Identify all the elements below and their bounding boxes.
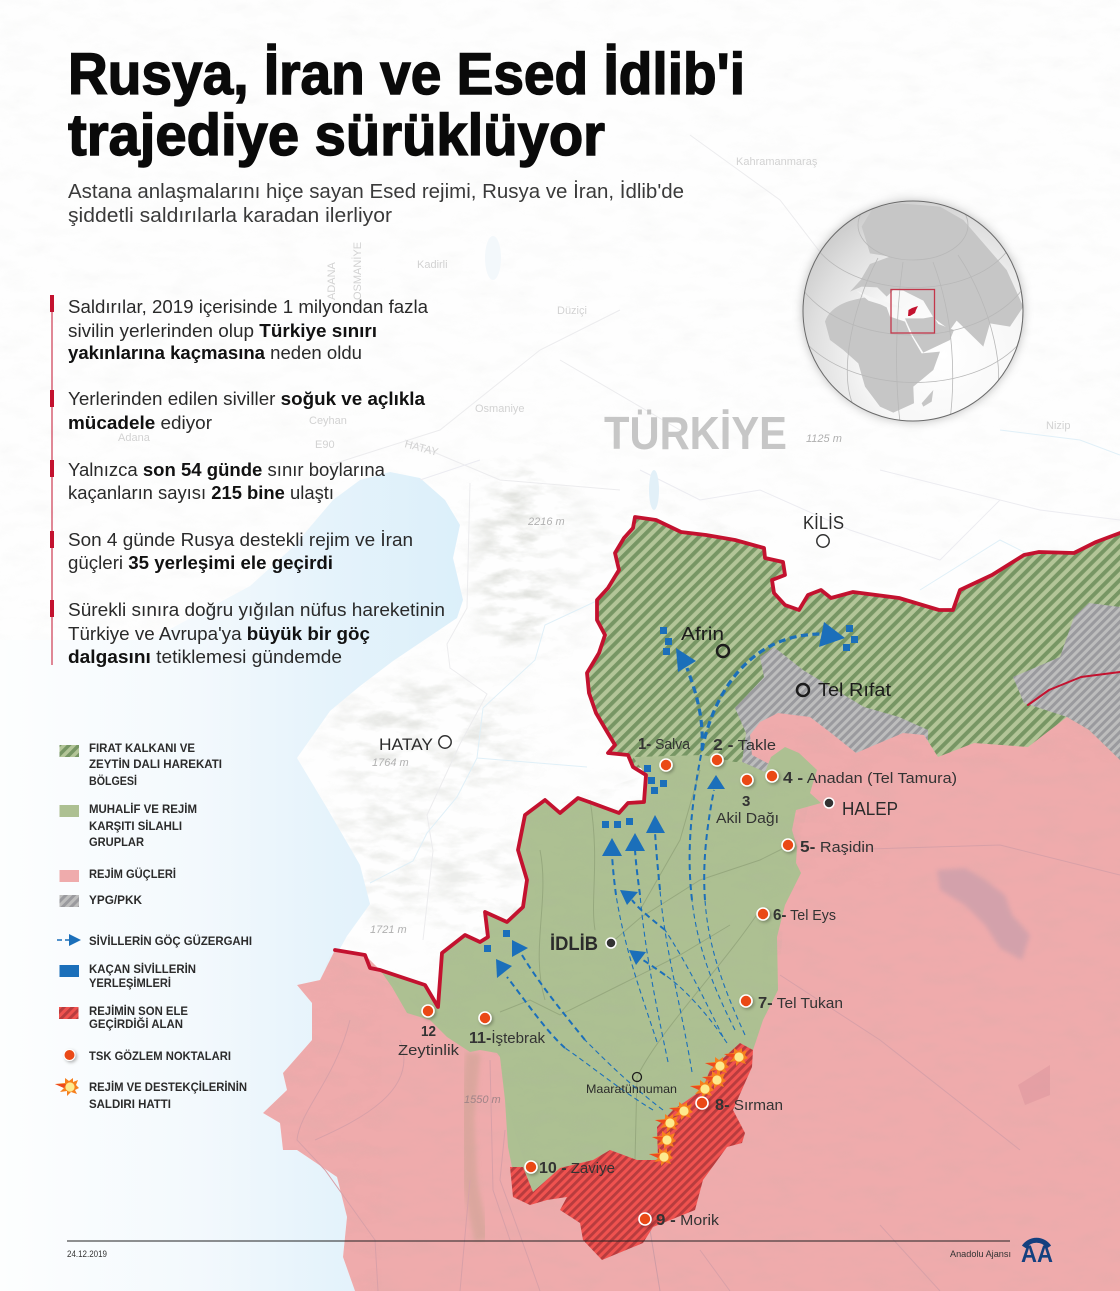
heading country name: Türkiye: TÜRKİYE: [604, 407, 787, 459]
faint base map place names: Kadirli: [417, 259, 448, 271]
text block: key facts: yakınlarına kaçmasına neden oldu: [68, 342, 362, 363]
faint base map place names: Nizip: [1046, 420, 1070, 432]
map labels: 8- Sırman: [715, 1097, 783, 1114]
legend: REJİM GÜÇLERİ: [89, 866, 176, 881]
map labels: KİLİS: [803, 513, 844, 533]
faint base map place names: Osmaniye: [475, 403, 525, 415]
map labels: HALEP: [842, 799, 898, 819]
legend: YERLEŞİMLERİ: [89, 975, 171, 990]
locator globe: [803, 190, 1023, 422]
map labels: 5- Raşidin: [800, 839, 874, 856]
footer rule: [67, 1240, 1010, 1242]
region: YPG/PKK east: [1013, 603, 1120, 760]
subtitle: şiddetli saldırılarla karadan ilerliyor: [68, 205, 392, 227]
text block: key facts: sivilin yerlerinden olup Türkiye sınırı: [68, 320, 377, 341]
text block: key facts: Yalnızca son 54 günde sınır boylarına: [68, 459, 386, 480]
map labels: 11-İştebrak: [469, 1029, 546, 1047]
map labels: Maaratünnuman: [586, 1082, 677, 1096]
text block: key facts: dalgasını tetiklemesi gündemde: [68, 646, 342, 667]
faint base map place names: 1764 m: [372, 757, 409, 769]
attack line flames: [649, 1048, 748, 1166]
faint base map place names: 1125 m: [806, 433, 842, 445]
text block: key facts: Son 4 günde Rusya destekli rejim ve İran: [68, 529, 413, 550]
legend: GRUPLAR: [89, 835, 144, 849]
Turkish border line: [335, 517, 1120, 1007]
region: armed opposition groups: [380, 747, 821, 1192]
map labels: 2 - Takle: [713, 737, 776, 754]
legend: YPG/PKK: [89, 893, 142, 907]
map labels: Zeytinlik: [398, 1042, 460, 1059]
region: Fırat Kalkanı and Zeytin Dalı hatched zone: [587, 517, 1120, 780]
legend: MUHALİF VE REJİM: [89, 801, 197, 816]
city markers: [439, 535, 834, 1082]
legend: REJİMİN SON ELE: [89, 1003, 188, 1018]
map labels: 7- Tel Tukan: [758, 995, 843, 1012]
text block: key facts: kaçanların sayısı 215 bine ulaştı: [68, 482, 334, 503]
map background: land, relief and sea: [120, 134, 1120, 1291]
map labels: 4 - Anadan (Tel Tamura): [783, 770, 957, 787]
map labels: Afrin: [681, 624, 724, 644]
legend: KAÇAN SİVİLLERİN: [89, 961, 196, 976]
faint base map place names: Kahramanmaraş: [736, 156, 818, 168]
arrowheads: [496, 622, 845, 978]
migration routes: dashed arrows: [507, 634, 820, 1110]
title: Rusya, İran ve Esed İdlib'i: [68, 42, 745, 107]
faint base map place names: 1721 m: [370, 924, 407, 936]
faint base map place names: Düziçi: [557, 305, 587, 317]
legend: SALDIRI HATTI: [89, 1097, 171, 1111]
terrain and lakes on regime area: [296, 844, 1120, 1291]
icon: agency logo: AA: [1021, 1241, 1053, 1268]
title: trajediye sürüklüyor: [68, 103, 605, 168]
map labels: [379, 513, 957, 1229]
subtitle: Astana anlaşmalarını hiçe sayan Esed rejimi, Rusya ve İran, İdlib'de: [68, 180, 684, 203]
faint base map place names: ADANA: [326, 261, 338, 300]
roads and relief on opposition area: [500, 770, 782, 1291]
legend: FIRAT KALKANI VE: [89, 741, 195, 755]
map labels: HATAY: [379, 735, 433, 754]
map labels: Akil Dağı: [716, 810, 779, 827]
text block: key facts: Yerlerinden edilen siviller soğuk ve açlıkla: [68, 388, 426, 409]
faint base map place names: [118, 156, 1070, 936]
map labels: 1550 m: [464, 1094, 501, 1106]
map labels: 3: [742, 793, 750, 810]
map labels: 12: [421, 1023, 436, 1040]
legend: REJİM VE DESTEKÇİLERİNİN: [89, 1079, 247, 1094]
map labels: İDLİB: [550, 934, 598, 955]
map labels: Tel Rıfat: [818, 680, 891, 700]
footer source: Anadolu Ajansı: [950, 1249, 1011, 1260]
legend: GEÇİRDİĞİ ALAN: [89, 1016, 183, 1031]
legend: KARŞITI SİLAHLI: [89, 818, 182, 833]
bullet side rule: [50, 295, 54, 665]
text block: key facts: güçleri 35 yerleşimi ele geçirdi: [68, 552, 333, 573]
legend: ZEYTİN DALI HAREKATI: [89, 756, 222, 771]
map labels: 9 - Morik: [656, 1212, 720, 1229]
region: area last captured by the regime: [510, 1043, 753, 1260]
title: [68, 42, 745, 168]
faint base map place names: 2216 m: [527, 516, 565, 528]
legend: SİVİLLERİN GÖÇ GÜZERGAHI: [89, 933, 252, 948]
text block: key facts: [68, 296, 445, 667]
text block: key facts: mücadele ediyor: [68, 412, 212, 433]
text block: key facts: Türkiye ve Avrupa'ya büyük bir göç: [68, 623, 370, 644]
subtitle: [68, 180, 684, 227]
map labels: 1- Salva: [638, 736, 691, 753]
legend: TSK GÖZLEM NOKTALARI: [89, 1048, 231, 1063]
footer date: 24.12.2019: [67, 1249, 107, 1260]
faint base map place names: E90: [315, 439, 335, 451]
legend: BÖLGESİ: [89, 773, 137, 788]
civilian settlements squares: [484, 625, 858, 952]
faint base map place names: Ceyhan: [309, 415, 347, 427]
map labels: 10 - Zaviye: [539, 1160, 615, 1177]
faint base map place names: Adana: [118, 432, 151, 444]
text block: key facts: Sürekli sınıra doğru yığılan nüfus hareketinin: [68, 599, 445, 620]
text block: key facts: Saldırılar, 2019 içerisinde 1 milyondan fazla: [68, 296, 429, 317]
map labels: 6- Tel Eys: [773, 907, 836, 924]
region: regime forces: [263, 713, 1120, 1291]
faint base map place names: HATAY: [403, 438, 440, 459]
faint base map place names: OSMANİYE: [351, 242, 364, 300]
legend: [55, 741, 252, 1111]
region: YPG/PKK Tel Rifat: [735, 647, 928, 772]
Turkish observation points: [422, 754, 794, 1225]
